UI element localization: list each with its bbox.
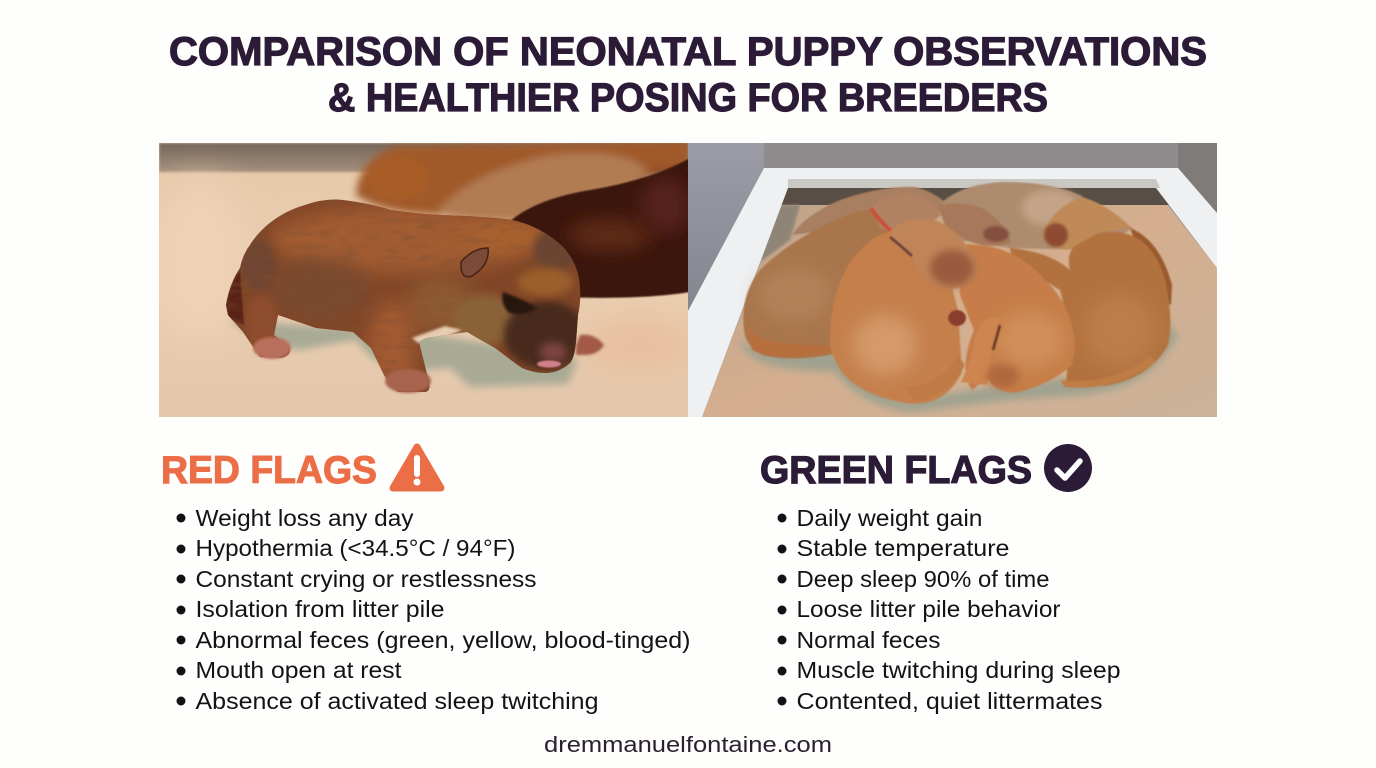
blanket shadow bbox=[228, 320, 578, 387]
floor shading bbox=[740, 320, 1178, 412]
list: red flags: Weight loss any day bbox=[196, 505, 414, 531]
list: red flags: Constant crying or restlessness bbox=[196, 566, 536, 592]
middle head bbox=[938, 203, 1011, 246]
title: & HEALTHIER POSING FOR BREEDERS bbox=[328, 76, 1048, 120]
paws bbox=[253, 337, 291, 359]
blurred littermates bbox=[356, 140, 690, 222]
list: red flags: Isolation from litter pile bbox=[196, 596, 444, 622]
title: COMPARISON OF NEONATAL PUPPY OBSERVATIONS bbox=[169, 30, 1207, 74]
list: red flags bbox=[176, 505, 690, 714]
list: green flags: Contented, quiet littermates bbox=[796, 688, 1102, 714]
photo: sleeping litter pile bbox=[688, 143, 1217, 417]
heading: green flags: GREEN FLAGS bbox=[760, 449, 1032, 492]
main puppy bbox=[215, 195, 604, 395]
list: green flags: Loose litter pile behavior bbox=[796, 596, 1061, 622]
puppy pile bbox=[743, 182, 1172, 404]
list: red flags: Absence of activated sleep twitching bbox=[196, 688, 598, 714]
heading: red flags: RED FLAGS bbox=[161, 449, 377, 492]
title bbox=[169, 30, 1207, 120]
whelping box walls bbox=[688, 143, 1217, 311]
front centre puppy body bbox=[830, 230, 962, 404]
list: red flags: Mouth open at rest bbox=[196, 657, 402, 683]
list: green flags: Muscle twitching during sleep bbox=[796, 657, 1120, 683]
dark littermate bbox=[500, 158, 690, 298]
back right puppy bbox=[942, 182, 1132, 250]
icon: warning triangle bbox=[393, 447, 441, 488]
list: green flags: Normal feces bbox=[796, 627, 940, 653]
right puppy bbox=[1010, 232, 1170, 386]
whelping box floor bbox=[702, 190, 1217, 417]
lump behind right puppy bbox=[1130, 228, 1172, 305]
photo: isolated neonatal puppy bbox=[150, 140, 700, 417]
list: red flags: Hypothermia (<34.5°C / 94°F) bbox=[196, 535, 516, 561]
list: green flags: Stable temperature bbox=[796, 535, 1010, 561]
icon: check circle bbox=[1044, 444, 1092, 492]
left puppy head bbox=[875, 210, 941, 230]
footer website: dremmanuelfontaine.com bbox=[544, 732, 832, 757]
front right puppy bbox=[958, 244, 1075, 393]
list: green flags: Daily weight gain bbox=[796, 505, 982, 531]
back left puppy bbox=[792, 187, 948, 240]
left large puppy bbox=[743, 210, 900, 358]
white frame bbox=[688, 168, 1217, 417]
centre tangle shadow bbox=[948, 310, 966, 326]
right back head bbox=[1042, 198, 1132, 250]
red collar bbox=[871, 208, 892, 232]
list: red flags: Abnormal feces (green, yellow, blood-tinged) bbox=[196, 627, 690, 653]
ear bbox=[461, 248, 488, 277]
front centre puppy head bbox=[890, 219, 978, 290]
list: green flags: Deep sleep 90% of time bbox=[796, 566, 1050, 592]
list: green flags bbox=[778, 505, 1120, 714]
